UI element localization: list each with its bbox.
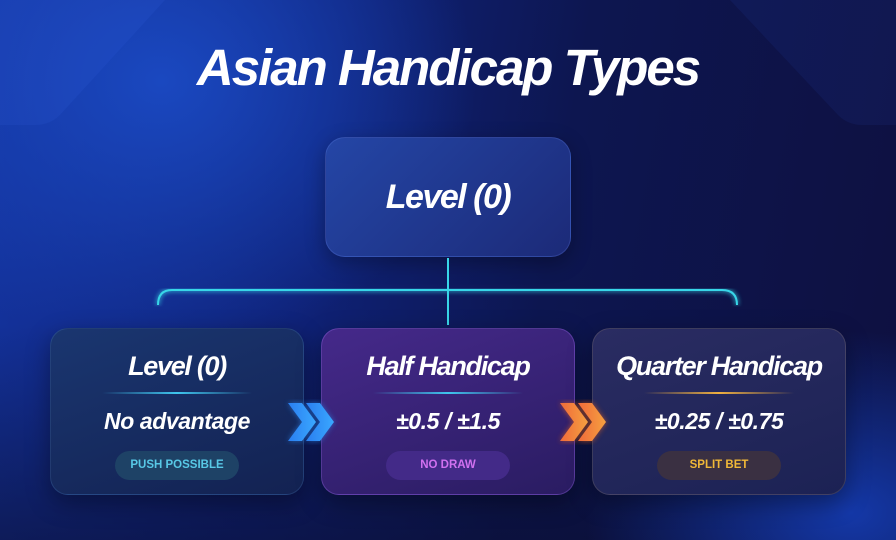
card: Quarter Handicap: SPLIT BET — [690, 459, 748, 471]
top box: Level (0) — [325, 137, 571, 257]
card: Level (0): No advantage — [104, 408, 250, 434]
card: Quarter Handicap: ±0.25 / ±0.75 — [655, 408, 783, 434]
card: Level (0): Level (0) — [128, 351, 226, 381]
title: Asian Handicap Types — [197, 39, 699, 96]
card: Half Handicap: NO DRAW — [420, 459, 476, 471]
card: Level (0) — [50, 328, 304, 495]
card: Level (0): PUSH POSSIBLE — [130, 459, 224, 471]
arrow: orange chevrons — [558, 399, 609, 445]
arrow: blue chevrons — [286, 399, 336, 445]
card: Half Handicap: ±0.5 / ±1.5 — [396, 408, 500, 434]
card: Quarter Handicap — [592, 328, 846, 495]
card: Half Handicap: Half Handicap — [366, 351, 530, 381]
top box: Level (0): Level (0) — [386, 178, 510, 216]
card: Half Handicap — [321, 328, 575, 495]
card: Quarter Handicap: Quarter Handicap — [616, 351, 822, 381]
